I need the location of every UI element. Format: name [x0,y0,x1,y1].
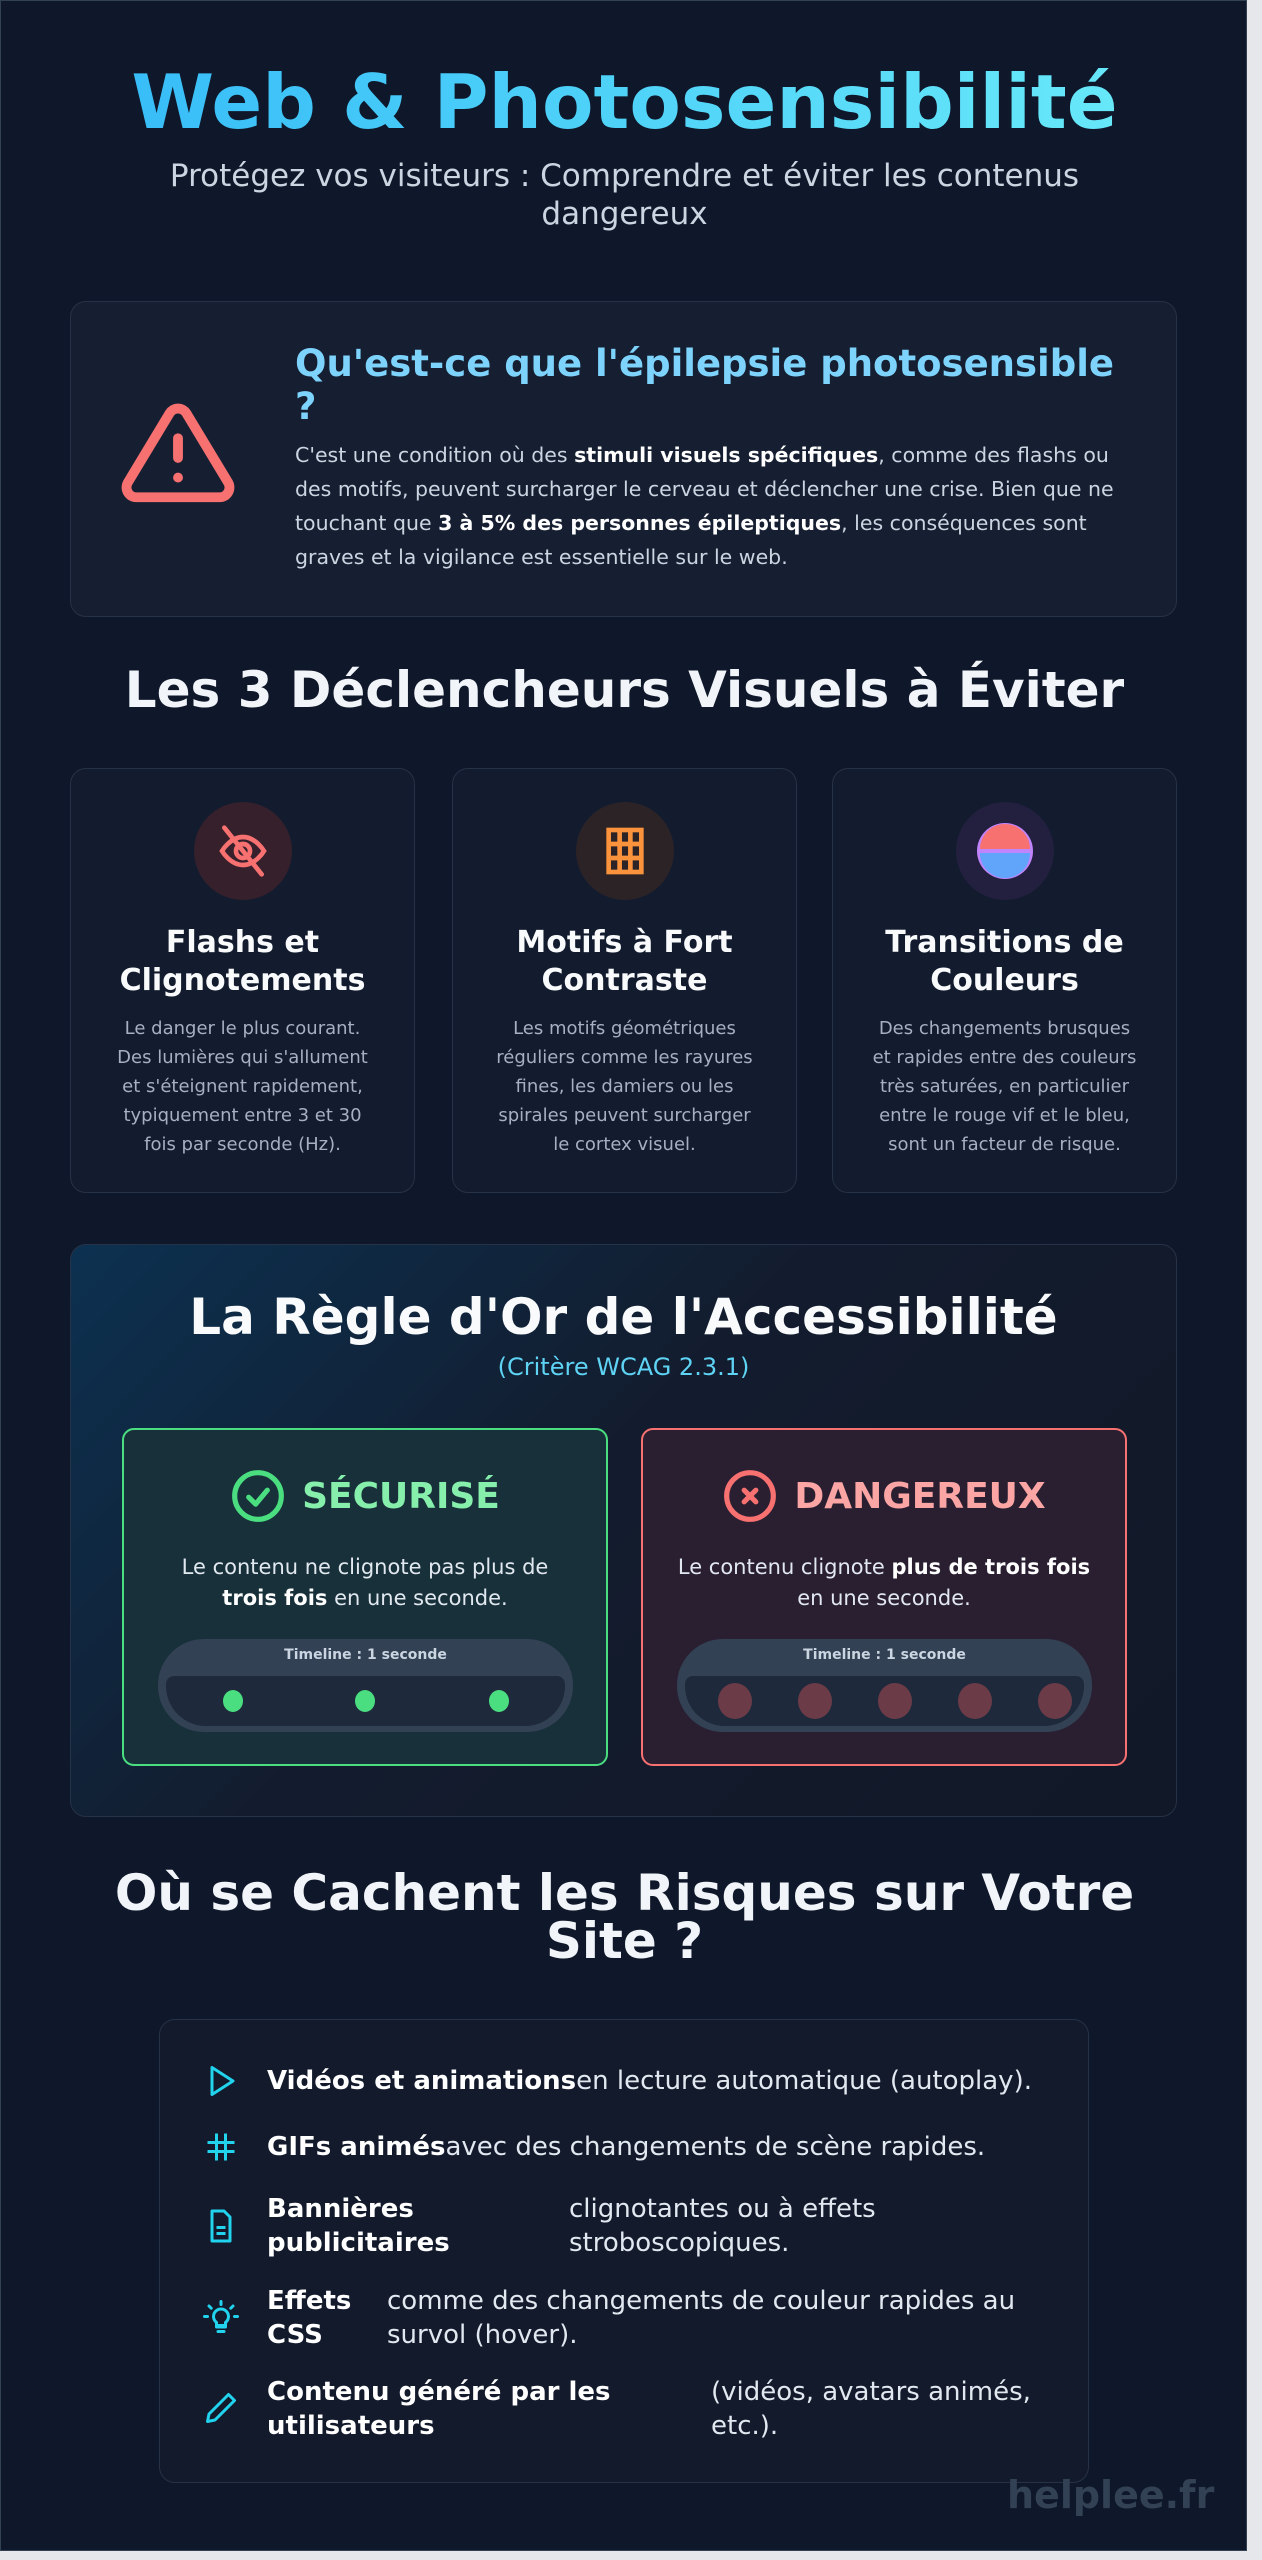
label safe: SÉCURISÉ [302,1476,500,1516]
card title [120,925,365,998]
title: Web & Photosensibilité [131,58,1118,146]
heading: Qu'est-ce que l'épilepsie photosensible ? [295,342,1114,428]
item: banners [267,2194,876,2258]
card title: Motifs à Fort [516,925,733,960]
icon: eye-off [194,802,292,900]
card title [885,925,1124,998]
item: user content: (vidéos, avatars animés, [711,2377,1031,2407]
card title: Clignotements [120,963,365,998]
card: motifs [452,768,797,1193]
timeline danger [677,1639,1092,1732]
card title: Contraste [542,963,707,998]
paragraph: C'est une condition où des stimuli visuels spécifiques, comme des flashs ou des motifs, peuvent surcharger le cerveau et déclencher une crise. Bien que ne touchant que 3 à 5% des personnes épileptiques, les conséquences sont graves et la vigilance est essentielle sur le web. [295,443,1114,569]
label danger: DANGEREUX [794,1476,1046,1516]
icon: document [210,2210,232,2242]
heading: 3 triggers: Les 3 Déclencheurs Visuels à Éviter [125,661,1124,719]
timeline safe [158,1639,573,1732]
card title [516,925,733,998]
card text: Les motifs géométriques réguliers comme les rayures fines, les damiers ou les spirales peuvent surcharger le cortex visuel. [496,1018,753,1155]
icon: grid [576,802,674,900]
footer: brand: helplee.fr [1007,2473,1214,2517]
card text: Le danger le plus courant. Des lumières qui s'allument et s'éteignent rapidement, typiquement entre 3 et 30 fois par seconde (Hz). [117,1018,368,1155]
subtitle: Protégez vos visiteurs : Comprendre et éviter les contenus dangereux [170,158,1079,232]
icon: bulb [203,2300,239,2333]
item: videos: Vidéos et animations [267,2066,576,2096]
item: user content: Contenu généré par les [267,2377,611,2407]
item: user content [267,2377,1031,2441]
card title: Transitions de [885,925,1124,960]
item: user content: utilisateurs [267,2411,435,2441]
icon: pencil [206,2392,236,2423]
item: banners: publicitaires [267,2228,450,2258]
icon: color circle [956,802,1054,900]
item: gifs: avec des changements de scène rapides. [445,2132,985,2162]
panel: what is photosensitive epilepsy [70,301,1177,617]
text: Le contenu ne clignote pas plus de trois fois en une seconde. [182,1555,548,1610]
card: transitions [832,768,1177,1193]
timeline safe: Timeline : 1 seconde [284,1647,447,1663]
label danger [724,1470,1046,1522]
item: css: survol (hover). [387,2320,578,2350]
item: css: CSS [267,2320,323,2350]
item: css: comme des changements de couleur rapides au [387,2286,1015,2316]
card: flashs [70,768,415,1193]
text: Le contenu clignote plus de trois fois en une seconde. [678,1555,1090,1610]
timeline danger: Timeline : 1 seconde [803,1647,966,1663]
card: danger [641,1428,1127,1766]
card title: Couleurs [930,963,1079,998]
item: banners: Bannières [267,2194,414,2224]
item: gifs: GIFs animés [267,2132,445,2162]
item: css [267,2286,1015,2350]
label safe [232,1470,500,1522]
panel: risk list [159,2019,1089,2483]
item: banners: stroboscopiques. [569,2228,789,2258]
item: user content: etc.). [711,2411,778,2441]
item: videos [267,2066,1032,2096]
heading: La Règle d'Or de l'Accessibilité [189,1288,1058,1346]
card title: Flashs et [166,925,319,960]
item: css: Effets [267,2286,351,2316]
item: videos: en lecture automatique (autoplay). [576,2066,1032,2096]
card text: Des changements brusques et rapides entre des couleurs très saturées, en particulier entre le rouge vif et le bleu, sont un facteur de risque. [873,1018,1136,1155]
icon: warning triangle [122,404,234,502]
icon: play [210,2066,235,2096]
panel: golden rule [70,1244,1177,1817]
card: safe [122,1428,608,1766]
heading: where risks hide: Où se Cachent les Risques sur Votre Site ? [115,1864,1134,1970]
icon: hash [208,2134,234,2160]
subheading: (Critère WCAG 2.3.1) [498,1353,749,1381]
item: banners: clignotantes ou à effets [569,2194,876,2224]
